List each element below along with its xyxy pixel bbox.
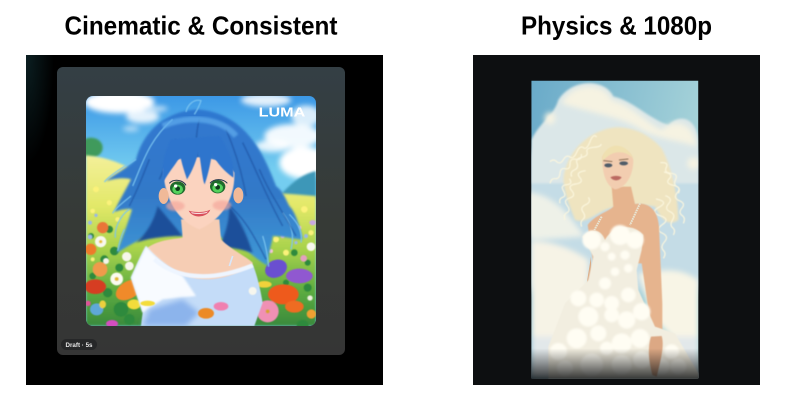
image: woman in cloud dress <box>531 80 698 378</box>
hair back <box>106 109 303 266</box>
badge: Draft 5s <box>61 339 97 350</box>
strap lines <box>594 203 640 230</box>
fringe <box>163 136 233 184</box>
panel: cinematic video frame <box>26 55 383 385</box>
text: LUMA watermark: LUMA <box>259 104 306 119</box>
front flowers <box>140 287 257 319</box>
panel: physics video frame <box>473 55 760 385</box>
bare shoulders and neck <box>143 219 253 283</box>
title: Physics & 1080p: Physics & 1080p <box>521 10 712 40</box>
title: Cinematic & Consistent: Cinematic & Consistent <box>64 10 338 40</box>
eyes <box>169 180 227 195</box>
mouth <box>189 210 210 216</box>
hand <box>649 336 663 377</box>
flowers <box>85 220 316 327</box>
bottom fade <box>531 348 698 378</box>
blouse <box>131 246 263 326</box>
face <box>163 157 234 229</box>
dark hair under <box>136 206 253 253</box>
clouds <box>515 150 715 290</box>
image: anime girl in flower meadow <box>86 96 316 326</box>
cloud dress <box>548 227 698 378</box>
face <box>602 148 633 189</box>
skin: neck, shoulders and arm <box>588 187 662 343</box>
meadow speckles <box>88 186 314 332</box>
badge: Draft 5s: Draft · 5s <box>66 343 93 349</box>
hair <box>563 127 678 223</box>
card: video player <box>57 67 345 355</box>
